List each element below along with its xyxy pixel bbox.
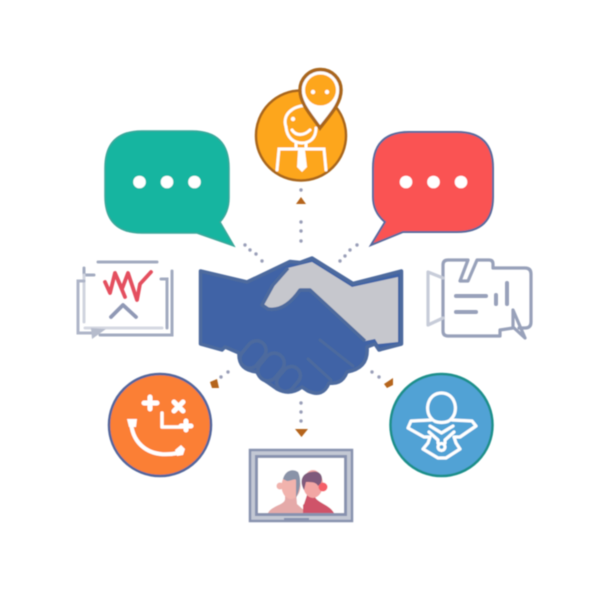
icon: handshake [200,258,402,395]
speech bubble: teal [105,131,234,246]
icon: blue figure circle [390,374,492,476]
arrow: down [295,429,308,437]
icon: framed portrait of two people [250,450,352,521]
arrow: lower left [210,379,219,388]
icon: left document stack with red scribble [78,262,172,339]
icon: person with location pin [256,69,346,180]
arrow: lower right [384,378,393,388]
icon: orange tactics circle [109,374,211,476]
arrow: up [296,197,306,204]
icon: right document with chat tail [428,260,531,338]
dotted connectors [219,188,381,423]
speech bubble: red [371,132,493,245]
